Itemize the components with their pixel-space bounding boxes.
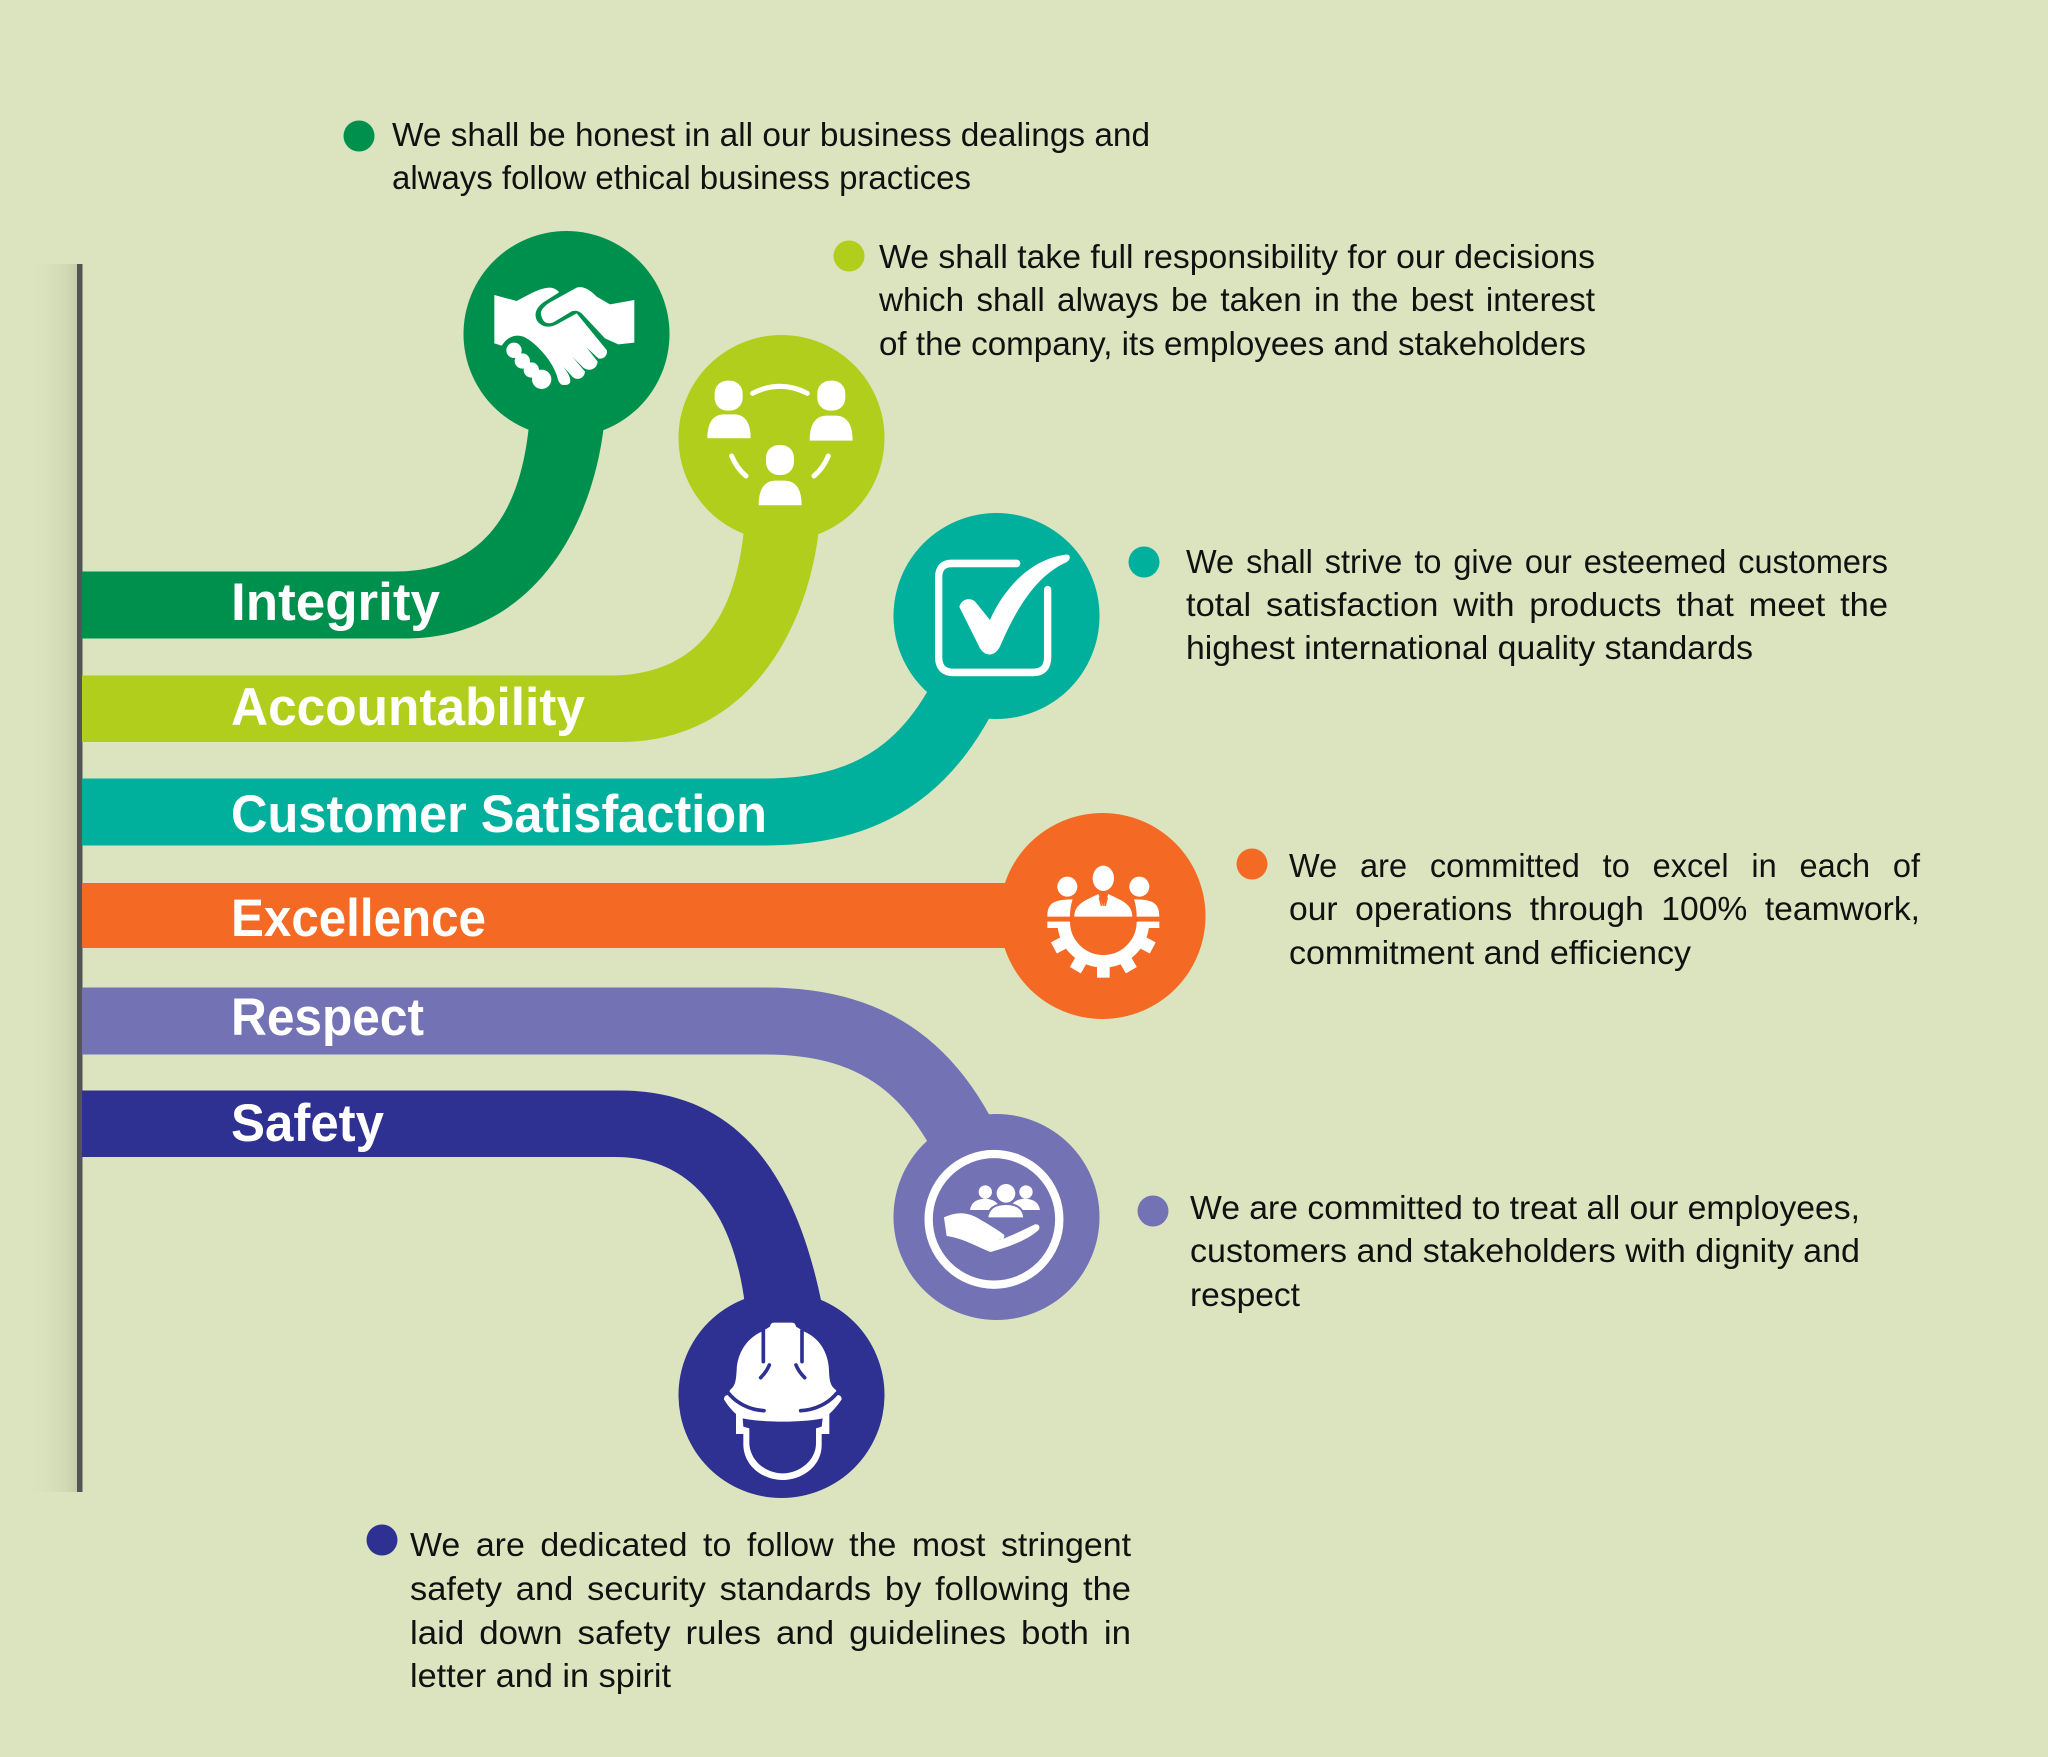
- text block: respect: respect: [1190, 1276, 1300, 1313]
- text block: excellence: [1236, 847, 1921, 971]
- icon: handshake: [494, 287, 634, 389]
- text block: customer satisfaction: total satisfaction with products that meet the: [1186, 586, 1888, 623]
- labels: Excellence: [231, 889, 486, 948]
- text block: respect: We are committed to treat all our employees,: [1190, 1189, 1860, 1226]
- value: accountability: [82, 335, 884, 742]
- text block: respect: customers and stakeholders with dignity and: [1190, 1232, 1860, 1269]
- text block: accountability: We shall take full responsibility for our decisions: [879, 238, 1595, 275]
- text block: safety: [366, 1524, 1131, 1694]
- labels: Accountability: [231, 678, 586, 737]
- text block: respect: [1138, 1189, 1860, 1313]
- text block: integrity: always follow ethical business practices: [392, 159, 971, 196]
- icon: team and gear: [1047, 866, 1159, 978]
- icon: people circle: [707, 381, 853, 505]
- text block: customer satisfaction: We shall strive to give our esteemed customers: [1186, 543, 1888, 580]
- text block: safety: safety and security standards by following the: [410, 1570, 1131, 1607]
- icon: check box: [939, 554, 1070, 672]
- text block: accountability: [834, 238, 1595, 362]
- text block: accountability: which shall always be taken in the best interest: [878, 281, 1595, 318]
- value: integrity: [82, 231, 670, 638]
- icon: hand holding people: [929, 1154, 1059, 1285]
- text block: safety: letter and in spirit: [410, 1657, 671, 1694]
- text block: integrity: We shall be honest in all our business dealings and: [392, 116, 1150, 153]
- text block: integrity: [344, 116, 1150, 196]
- labels: Respect: [231, 988, 424, 1047]
- value: customer satisfaction: [82, 513, 1100, 812]
- text block: safety: We are dedicated to follow the most stringent: [410, 1526, 1131, 1563]
- value: respect: [82, 1021, 1100, 1320]
- text block: excellence: We are committed to excel in each of: [1289, 847, 1921, 884]
- icon: hard hat: [724, 1323, 842, 1480]
- value: excellence: [82, 813, 1206, 1019]
- labels: Integrity: [231, 573, 441, 632]
- text block: customer satisfaction: highest international quality standards: [1186, 629, 1753, 666]
- value: safety: [82, 1090, 884, 1498]
- labels: Safety: [231, 1094, 385, 1153]
- text block: excellence: commitment and efficiency: [1289, 934, 1692, 971]
- labels: [231, 573, 767, 1153]
- labels: Customer Satisfaction: [231, 785, 767, 844]
- text block: excellence: our operations through 100% teamwork,: [1289, 890, 1920, 927]
- text block: safety: laid down safety rules and guidelines both in: [410, 1614, 1131, 1651]
- text block: customer satisfaction: [1128, 543, 1888, 666]
- vertical axis line: [28, 264, 82, 1492]
- text block: accountability: of the company, its employees and stakeholders: [879, 325, 1586, 362]
